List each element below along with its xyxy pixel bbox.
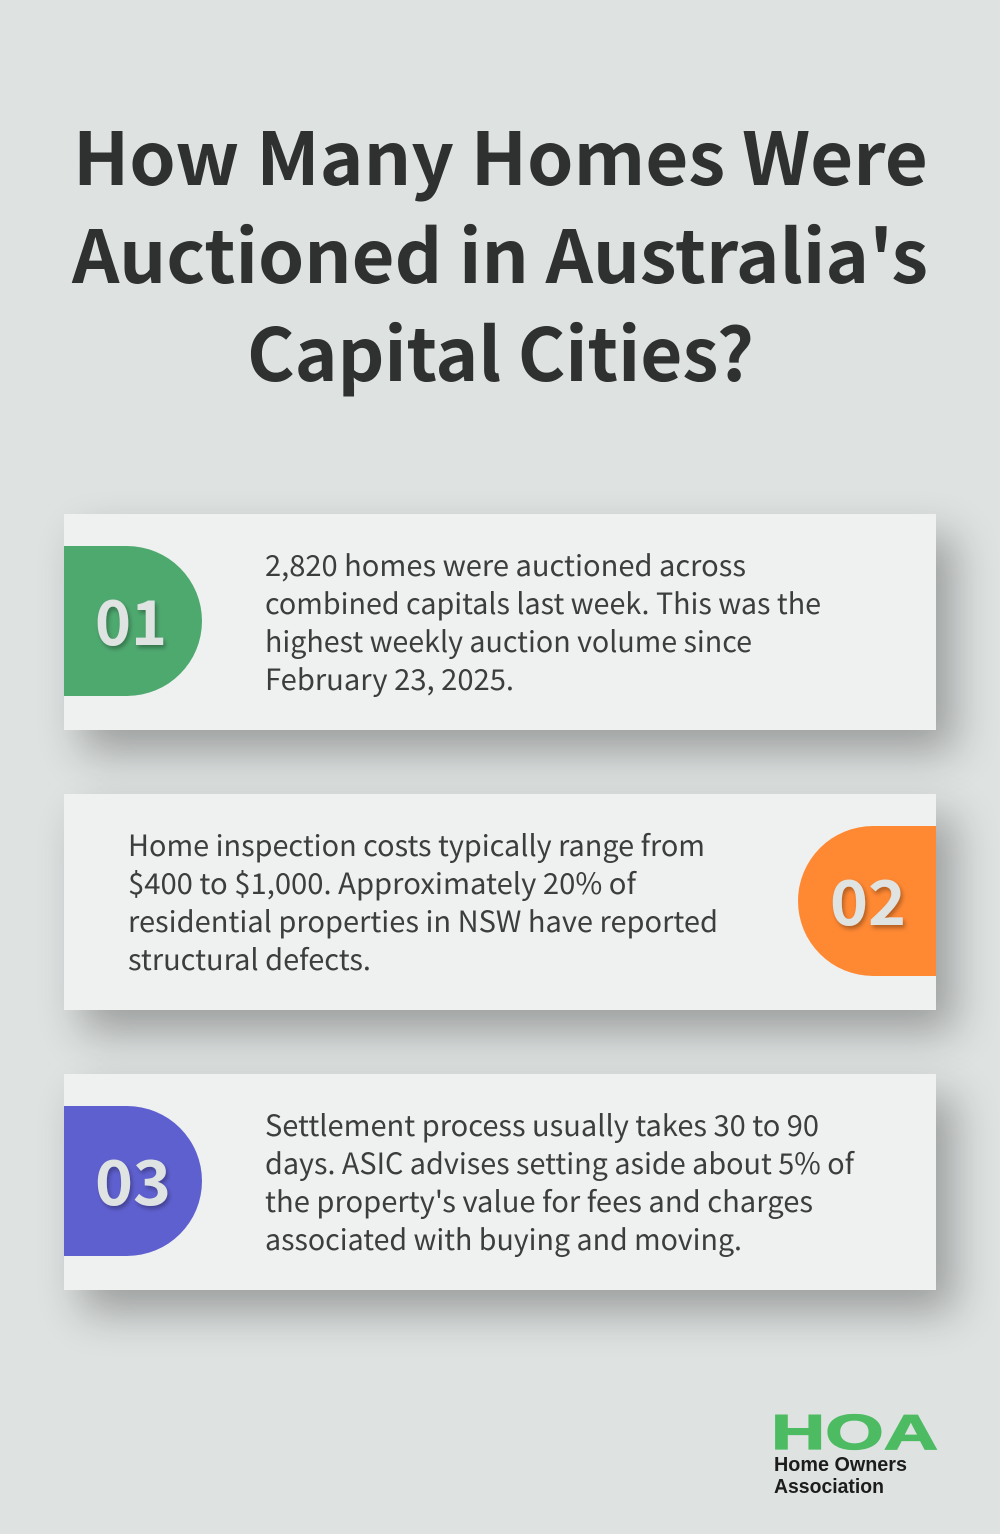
logo: HOA Home Owners Association: HOA	[771, 1406, 938, 1460]
text: inspection costs	[128, 823, 718, 979]
text: auction volume: highest weekly auction volume since	[265, 619, 752, 661]
text: inspection costs: $400 to $1,000. Approximately 20% of	[128, 861, 638, 903]
logo: HOA Home Owners Association: Home Owners	[774, 1454, 907, 1476]
text: settlement process: the property's value for fees and charges	[265, 1179, 813, 1221]
title: Auctioned in Australia's	[71, 199, 928, 305]
text: auction volume: combined capitals last week. This was the	[265, 581, 821, 623]
badge: orange 02: 02	[830, 853, 906, 943]
panel: card 01	[64, 514, 936, 730]
badge: green 01: 01	[95, 573, 167, 663]
panel: card 02	[64, 794, 936, 1010]
text: settlement process: days. ASIC advises setting aside about 5% of	[265, 1141, 856, 1183]
badge: orange 02	[798, 826, 936, 976]
logo: HOA Home Owners Association: Association	[774, 1476, 884, 1498]
text: settlement process: associated with buying and moving.	[265, 1217, 742, 1259]
text: settlement process	[265, 1103, 856, 1259]
text: inspection costs: structural defects.	[128, 937, 371, 979]
text: settlement process: Settlement process usually takes 30 to 90	[265, 1103, 819, 1145]
panel: card 03	[64, 1074, 936, 1290]
text: auction volume: 2,820 homes were auctioned across	[265, 543, 746, 585]
text: auction volume: February 23, 2025.	[265, 657, 514, 699]
title: How Many Homes Were	[73, 101, 928, 207]
title	[71, 101, 928, 403]
text: auction volume	[265, 543, 821, 699]
badge: purple 03	[64, 1106, 202, 1256]
text: inspection costs: residential properties in NSW have reported	[128, 899, 718, 941]
title: Capital Cities?	[247, 297, 754, 403]
badge: purple 03: 03	[95, 1133, 171, 1223]
badge: green 01	[64, 546, 202, 696]
text: inspection costs: Home inspection costs typically range from	[128, 823, 705, 865]
